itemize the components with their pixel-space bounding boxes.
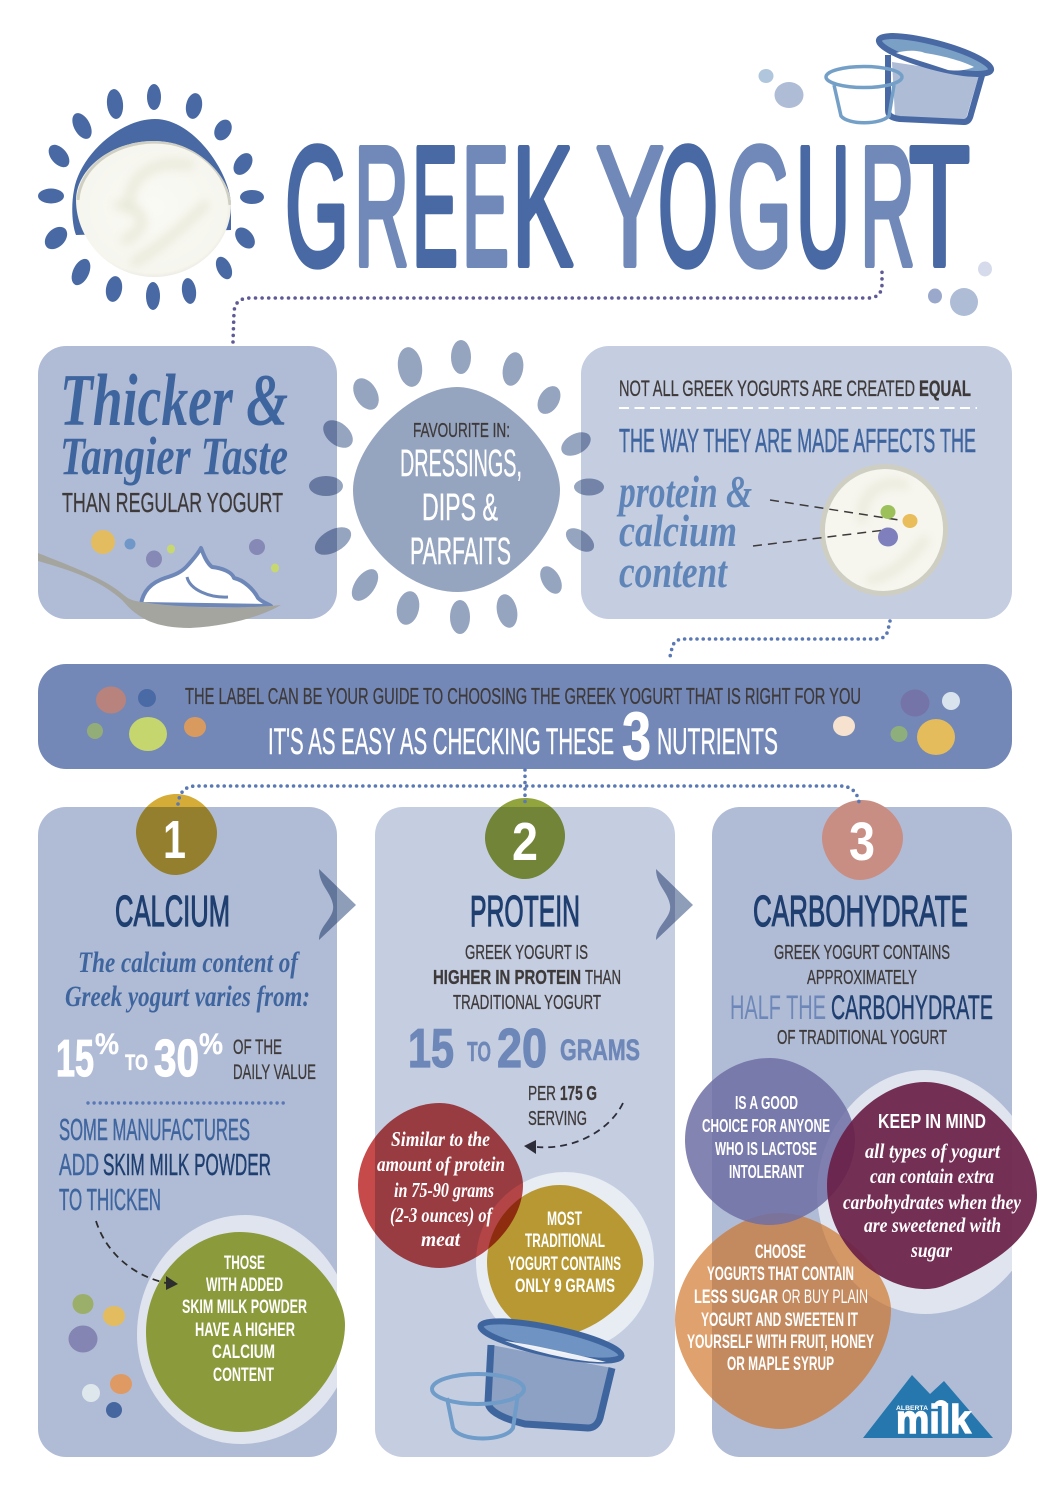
text: choose less sugar: OR MAPLE SYRUP	[727, 1354, 834, 1375]
title: Y	[596, 112, 664, 302]
title: G	[727, 112, 792, 302]
text: per 175 g serving: PER	[528, 1083, 556, 1105]
heading: tangier taste: Tangier Taste	[60, 426, 288, 486]
title: U	[796, 112, 850, 302]
text: manufactures: ADD	[59, 1147, 99, 1182]
callout: traditional yogurt	[476, 1172, 654, 1352]
text: greek yogurt contains: APPROXIMATELY	[807, 967, 917, 989]
text: manufactures: SOME MANUFACTURES	[59, 1112, 250, 1147]
text: parfaits: PARFAITS	[410, 531, 511, 573]
title: G	[285, 112, 349, 302]
icon: spoon with yogurt	[38, 530, 281, 628]
icon: yogurt bowl with nutrients	[753, 454, 958, 606]
callout: traditional yogurt: TRADITIONAL	[525, 1231, 605, 1252]
icon: yogurt sun	[38, 84, 264, 310]
callout: traditional yogurt: ONLY 9 GRAMS	[515, 1276, 615, 1297]
badge: number 3: 3	[849, 812, 875, 872]
decorative dots: banner	[87, 686, 960, 755]
text: higher in protein: THAN	[585, 967, 621, 989]
panel: not all greek yogurts	[581, 346, 1012, 619]
callout: skim milk powder	[137, 1215, 352, 1444]
text: than regular yogurt: THAN REGULAR YOGURT	[62, 487, 283, 518]
text: greek yogurt contains	[774, 942, 950, 1049]
callout: lactose intolerant: IS A GOOD	[735, 1092, 798, 1113]
callout: similar to meat: in 75-90 grams	[394, 1178, 494, 1202]
text: of the daily value: DAILY VALUE	[233, 1061, 316, 1084]
text: of the daily value	[233, 1036, 316, 1084]
text: calcium content varies: Greek yogurt varies from:	[65, 980, 310, 1013]
panel: label banner	[38, 664, 1012, 774]
text: higher in protein: GREEK YOGURT IS	[465, 942, 588, 964]
text: per 175 g serving	[528, 1083, 597, 1130]
text: protein and calcium content: content	[619, 546, 728, 597]
stat: 15 to 20 grams: 15	[408, 1017, 454, 1079]
text: protein and calcium content	[616, 466, 752, 597]
arrow: serving to protein callout	[524, 1103, 623, 1154]
text: half the carbohydrate: HALF THE	[730, 989, 826, 1027]
badge: number 3	[822, 800, 903, 880]
text: dips: DIPS &	[422, 487, 498, 529]
callout: skim milk powder: WITH ADDED	[206, 1275, 283, 1296]
callout: keep in mind: can contain extra	[870, 1164, 994, 1188]
icon: yogurt cups	[432, 1313, 624, 1438]
callout: keep in mind: are sweetened with	[864, 1213, 1001, 1237]
text: dressings: DRESSINGS,	[400, 443, 522, 485]
callout: similar to meat	[358, 1103, 523, 1268]
text: choose less sugar: YOGURTS THAT CONTAIN	[707, 1264, 854, 1285]
text: choose less sugar: YOGURT AND SWEETEN IT	[701, 1310, 858, 1331]
callout: similar to meat: (2-3 ounces) of	[390, 1203, 494, 1227]
heading: protein: PROTEIN	[470, 887, 580, 936]
callout: traditional yogurt: YOGURT CONTAINS	[508, 1254, 621, 1275]
callout: similar to meat: amount of protein	[377, 1152, 505, 1176]
text: favourite in: FAVOURITE IN:	[413, 420, 510, 442]
stat: 15 to 20 grams: GRAMS	[560, 1034, 640, 1067]
text: protein and calcium content: calcium	[619, 505, 737, 556]
panel: calcium column	[38, 794, 352, 1457]
text: three nutrients: NUTRIENTS	[657, 721, 778, 762]
panel: protein column	[358, 798, 675, 1457]
stat: 15 to 30 percent: %	[199, 1028, 223, 1061]
title: T	[909, 112, 970, 302]
text: greek yogurt contains: OF TRADITIONAL YOGURT	[777, 1027, 947, 1049]
heading: calcium: CALCIUM	[115, 887, 230, 936]
text: three nutrients	[268, 698, 778, 774]
text: calcium content varies	[65, 946, 310, 1013]
panel: favourite in sun	[309, 340, 604, 634]
chevron: protein to carbohydrate	[656, 869, 693, 940]
text: of the daily value: OF THE	[233, 1036, 282, 1059]
callout: skim milk powder: THOSE	[224, 1253, 265, 1274]
callout: traditional yogurt: MOST	[547, 1209, 582, 1230]
dotted connector: panel to banner	[669, 621, 890, 661]
badge: number 1	[136, 794, 217, 875]
title: K	[512, 112, 573, 302]
logo: alberta milk	[863, 1375, 993, 1442]
stat: 15 to 30 percent: TO	[125, 1050, 148, 1075]
text: not all: EQUAL	[919, 376, 971, 401]
text: choose less sugar	[687, 1242, 874, 1375]
logo: alberta milk: ALBERTA	[896, 1406, 929, 1412]
halo: keep in mind	[818, 1070, 1012, 1314]
decorative dots: top right	[758, 69, 992, 316]
callout: skim milk powder: CONTENT	[213, 1365, 274, 1386]
heading: thicker: Thicker &	[60, 360, 288, 442]
callout: keep in mind: sugar	[910, 1238, 953, 1262]
dotted connector: title to panel	[233, 268, 882, 342]
stat: 15 to 20 grams: 20	[497, 1017, 547, 1079]
text: half the carbohydrate	[730, 989, 993, 1027]
callout: skim milk powder: CALCIUM	[212, 1342, 275, 1363]
stat: 15 to 30 percent: 15	[56, 1030, 94, 1088]
badge: number 2	[485, 798, 565, 879]
callout: choose less sugar	[675, 1213, 891, 1429]
text: choose less sugar: YOURSELF WITH FRUIT, HONEY	[687, 1332, 874, 1353]
callout: lactose intolerant: INTOLERANT	[729, 1161, 804, 1182]
text: three nutrients: IT'S AS EASY AS CHECKING THESE	[268, 721, 614, 762]
text: choose less sugar: CHOOSE	[755, 1242, 806, 1263]
title: R	[354, 112, 409, 302]
text: per 175 g serving: 175 G	[560, 1083, 597, 1105]
stat: 15 to 30 percent: %	[95, 1028, 119, 1061]
badge: number 2: 2	[512, 812, 538, 872]
stat: 15 to 20 grams: TO	[467, 1036, 491, 1067]
title: E	[462, 112, 509, 302]
badge: number 1: 1	[163, 810, 186, 870]
dotted connector: banner to columns	[178, 770, 859, 804]
text: per 175 g serving: SERVING	[528, 1108, 587, 1130]
logo: alberta milk: milk	[896, 1398, 972, 1442]
stat: 15 to 20 grams	[408, 1017, 640, 1079]
callout: skim milk powder: HAVE A HIGHER	[195, 1320, 295, 1341]
text: higher in protein	[433, 942, 621, 1014]
title: O	[658, 112, 718, 302]
callout: similar to meat: meat	[421, 1227, 461, 1251]
panel: thicker and tangier	[38, 346, 337, 628]
text: choose less sugar: OR BUY PLAIN	[782, 1287, 868, 1308]
stat: 15 to 30 percent	[56, 1028, 223, 1088]
text: manufactures	[59, 1112, 271, 1217]
callout: keep in mind	[827, 1082, 1037, 1289]
text: higher in protein: HIGHER IN PROTEIN	[433, 967, 581, 989]
text: manufactures: SKIM MILK POWDER	[103, 1147, 271, 1182]
arrow: thicken to callout	[96, 1221, 178, 1290]
callout: lactose intolerant: CHOICE FOR ANYONE	[702, 1115, 830, 1136]
callout: lactose intolerant: WHO IS LACTOSE	[715, 1138, 817, 1159]
callout: similar to meat: Similar to the	[391, 1127, 490, 1151]
text: three nutrients: 3	[622, 698, 651, 774]
text: greek yogurt contains: GREEK YOGURT CONTAINS	[774, 942, 950, 964]
blob	[353, 387, 560, 592]
callout: lactose intolerant	[685, 1058, 855, 1225]
icon: yogurt cups	[826, 28, 994, 123]
text: calcium content varies: The calcium content of	[78, 946, 300, 979]
title: R	[860, 112, 915, 302]
panel: carbohydrate column	[712, 800, 1012, 1457]
stat: 15 to 30 percent: 30	[154, 1030, 199, 1088]
callout: keep in mind: KEEP IN MIND	[878, 1111, 986, 1133]
title: E	[412, 112, 458, 302]
callout: skim milk powder: SKIM MILK POWDER	[182, 1297, 307, 1318]
text: choose less sugar: LESS SUGAR	[694, 1287, 778, 1308]
text: manufactures: TO THICKEN	[59, 1182, 161, 1217]
text: higher in protein: TRADITIONAL YOGURT	[453, 992, 601, 1014]
title	[285, 112, 970, 302]
text: protein and calcium content: protein &	[616, 466, 752, 517]
decorative dots: calcium	[68, 1294, 132, 1418]
chevron: calcium to protein	[319, 869, 356, 940]
callout: keep in mind: all types of yogurt	[865, 1139, 1001, 1163]
